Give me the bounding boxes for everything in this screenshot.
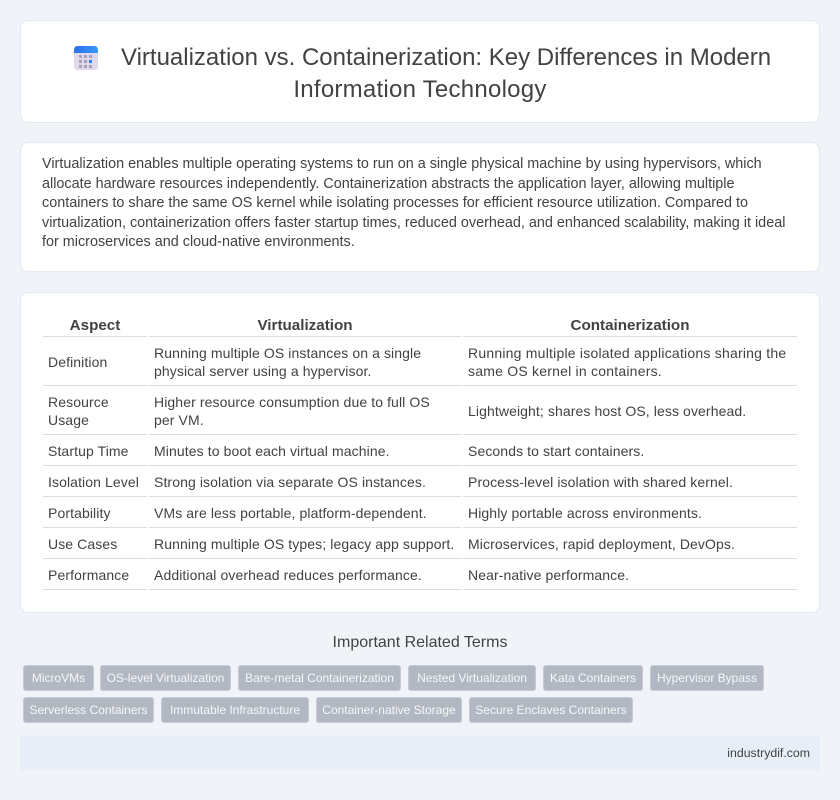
row: startup time: Startup Time	[48, 443, 129, 459]
title card	[20, 20, 820, 123]
related terms heading: Important Related Terms	[333, 634, 507, 651]
text block: intro: for microservices and cloud-native environments.	[42, 234, 355, 250]
tag	[23, 697, 154, 723]
row: portability: Highly portable across environments.	[468, 505, 702, 521]
row: resource usage: per VM.	[154, 412, 204, 428]
table header	[70, 317, 689, 334]
tag: Serverless Containers	[29, 703, 148, 717]
comparison table	[43, 317, 797, 590]
row: isolation level: Strong isolation via separate OS instances.	[154, 474, 426, 490]
panel: intro paragraph	[20, 142, 820, 272]
table header: Aspect	[70, 317, 120, 334]
tag: Container-native Storage	[322, 703, 456, 717]
row: definition: physical server using a hypervisor.	[154, 363, 372, 379]
footer	[20, 736, 820, 770]
text block: intro	[42, 156, 785, 250]
table header: Virtualization	[257, 317, 353, 334]
tag	[469, 697, 633, 723]
row: portability	[48, 505, 702, 521]
heading: Virtualization vs. Containerization: Key Differences in Modern	[121, 44, 771, 71]
tag	[650, 665, 764, 691]
row: use cases	[48, 536, 735, 552]
footer source: industrydif.com	[727, 746, 810, 760]
row: portability: VMs are less portable, platform-dependent.	[154, 505, 427, 521]
row: resource usage: Usage	[48, 412, 89, 428]
tag: Hypervisor Bypass	[657, 671, 757, 685]
text block: intro: virtualization, containerization offers faster startup times, reduced overhead, and enhanced scalability, making it ideal	[42, 215, 785, 231]
row: definition: same OS kernel in containers.	[468, 363, 662, 379]
panel: comparison table	[20, 292, 820, 613]
tag	[100, 665, 231, 691]
row: startup time: Minutes to boot each virtual machine.	[154, 443, 390, 459]
row: isolation level: Process-level isolation with shared kernel.	[468, 474, 733, 490]
row: definition: Running multiple isolated applications sharing the	[468, 345, 786, 361]
row: portability: Portability	[48, 505, 111, 521]
text block: intro: containers to share the same OS kernel while isolating processes for efficient resource utilization. Compared to	[42, 195, 748, 211]
tag	[161, 697, 309, 723]
icon: calendar	[74, 46, 98, 70]
text block: intro: Virtualization enables multiple operating systems to run on a single physical machine by using hypervisors, which	[42, 156, 762, 172]
table header: Containerization	[570, 317, 689, 334]
row: performance: Near-native performance.	[468, 567, 629, 583]
row: resource usage: Higher resource consumption due to full OS	[154, 394, 430, 410]
row: performance: Performance	[48, 567, 129, 583]
heading: Information Technology	[293, 76, 547, 103]
tag: Secure Enclaves Containers	[475, 703, 627, 717]
tag	[238, 665, 401, 691]
row: use cases: Running multiple OS types; legacy app support.	[154, 536, 454, 552]
row: use cases: Microservices, rapid deployment, DevOps.	[468, 536, 735, 552]
tag: MicroVMs	[32, 671, 85, 685]
tag: Immutable Infrastructure	[170, 703, 300, 717]
heading	[121, 44, 771, 103]
tag	[408, 665, 536, 691]
row: performance: Additional overhead reduces performance.	[154, 567, 422, 583]
tag: Kata Containers	[550, 671, 636, 685]
tag: Nested Virtualization	[417, 671, 527, 685]
row: definition: Running multiple OS instances on a single	[154, 345, 421, 361]
row: resource usage: Resource	[48, 394, 109, 410]
row: use cases: Use Cases	[48, 536, 117, 552]
tags: related terms	[23, 665, 764, 723]
row: isolation level	[48, 474, 733, 490]
row: definition	[48, 345, 786, 379]
row: resource usage	[48, 394, 746, 428]
text block: intro: allocate hardware resources independently. Containerization abstracts the application layer, allowing multiple	[42, 176, 734, 192]
row: startup time	[48, 443, 644, 459]
tag: Bare-metal Containerization	[245, 671, 394, 685]
row: isolation level: Isolation Level	[48, 474, 139, 490]
tag: OS-level Virtualization	[107, 671, 224, 685]
tag	[316, 697, 462, 723]
row: performance	[48, 567, 629, 583]
row: resource usage: Lightweight; shares host OS, less overhead.	[468, 403, 746, 419]
row: definition: Definition	[48, 354, 107, 370]
row: startup time: Seconds to start containers.	[468, 443, 644, 459]
tag	[23, 665, 94, 691]
tag	[543, 665, 643, 691]
